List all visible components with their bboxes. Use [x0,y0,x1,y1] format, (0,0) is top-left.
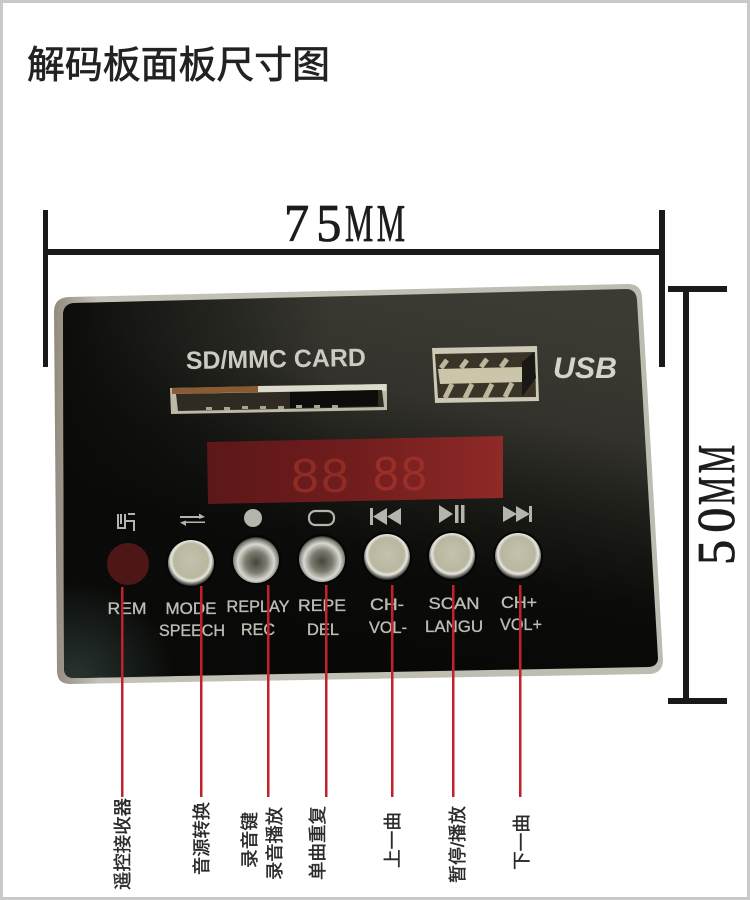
width dimension: 75MM: 75 [284,195,341,253]
vertical function labels [113,798,532,890]
button: REPLAY [231,535,281,585]
button labels: REPE [298,596,346,615]
button labels [108,593,542,640]
button labels: VOL- [369,618,407,637]
width dimension: 75MM [43,195,665,367]
REM sensor [107,543,149,585]
icon: mode arrows [180,514,205,526]
LED display: 88 [372,449,428,506]
button: MODE [166,538,216,588]
button labels: VOL+ [500,615,542,634]
label: USB: USB [553,352,617,385]
SD card slot [170,384,387,414]
icon: record dot [244,509,262,527]
vertical function labels: 遥控接收器 [113,798,133,890]
icon: remote sensor [118,514,135,531]
width dimension: 75MM: MM [345,195,405,253]
vertical function labels: 音源转换 [192,802,212,875]
height dimension: 50MM [668,286,746,704]
button labels: LANGU [425,617,483,636]
button labels: SCAN [428,594,480,613]
buttons [166,531,543,588]
vertical function labels: 录音键 [240,812,260,868]
red leader lines [121,585,522,797]
LED display [207,436,503,508]
icon: previous [370,508,401,525]
vertical function labels: 单曲重复 [308,806,328,880]
button labels: REC [241,620,275,639]
LED display: 88 [290,451,350,508]
icon: next [503,506,532,522]
button: CH+ [493,531,543,581]
panel: decoder board [54,284,663,890]
icons above buttons [118,505,532,531]
vertical function labels: 录音播放 [265,807,285,880]
USB port [432,346,539,403]
vertical function labels: 暂停/播放 [448,806,468,883]
button labels: CH+ [501,593,537,612]
button labels: CH- [370,595,404,614]
title: 解码板面板尺寸图 [27,45,330,87]
button: SCAN [427,531,477,581]
button labels: SPEECH [159,621,225,640]
vertical function labels: 下一曲 [512,814,532,870]
button labels: REPLAY [226,597,290,616]
button: CH- [362,532,412,582]
vertical function labels: 上一曲 [383,812,403,868]
icon: repeat [309,511,334,525]
button labels: REM [108,599,146,618]
height dimension: 50MM: 50 [688,508,746,565]
height dimension: 50MM: MM [688,445,746,505]
button labels: DEL [307,620,339,639]
label: SD/MMC CARD: SD/MMC CARD [186,344,366,375]
icon: play pause [439,505,464,523]
button labels: MODE [166,599,216,618]
button: REPE [297,534,347,584]
